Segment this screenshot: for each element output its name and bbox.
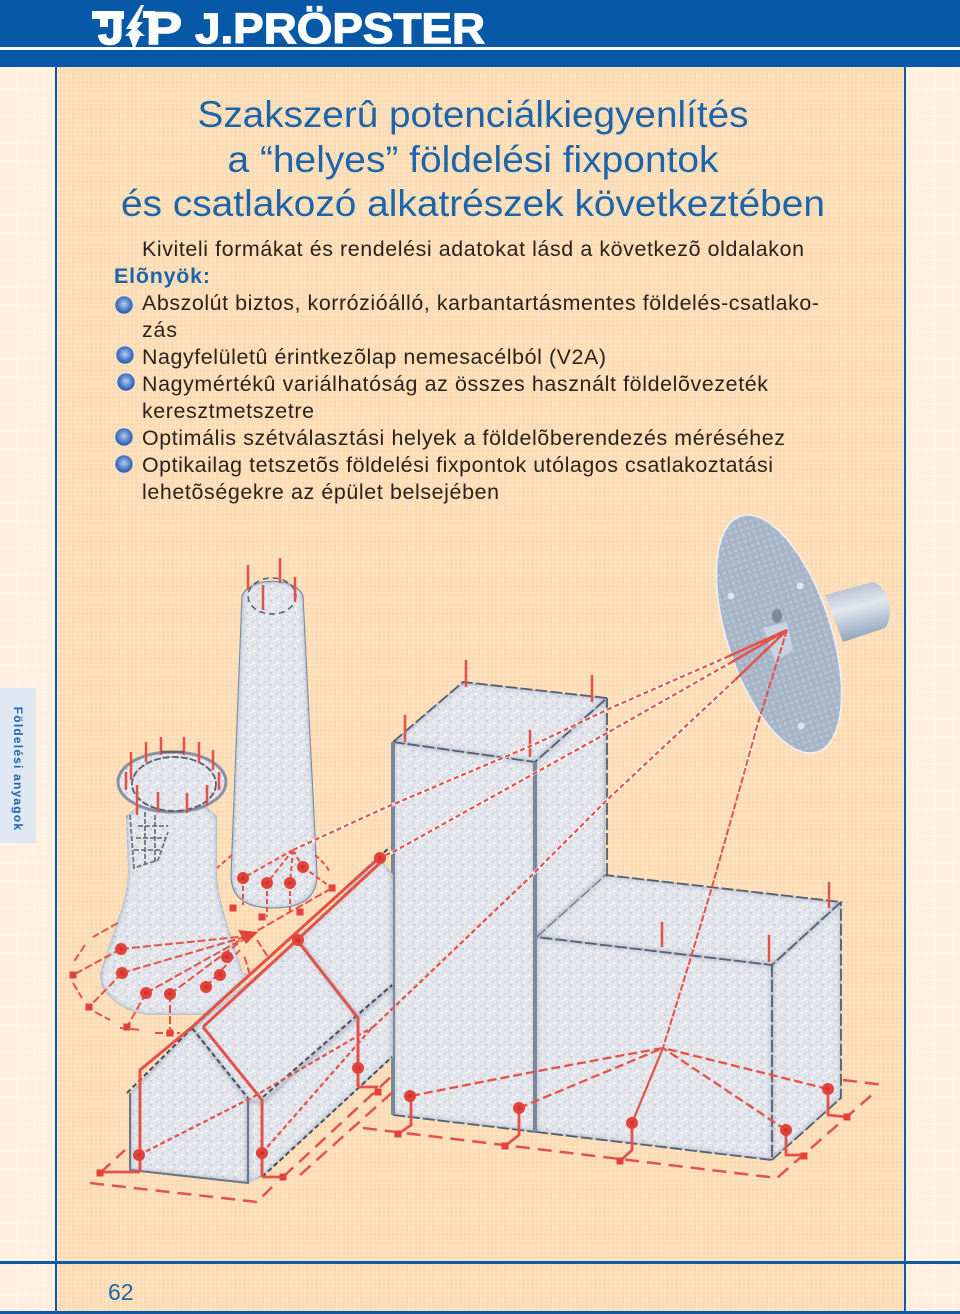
text block: intro and advantages: Optikailag tetszetõs földelési fixpontok utólagos csatlakoztatási [142, 453, 773, 477]
bullets [115, 296, 135, 473]
text block: intro and advantages: Elõnyök: [114, 264, 210, 288]
logo: J/P monogram [92, 3, 182, 54]
title [121, 94, 825, 224]
text block: intro and advantages: Optimális szétválasztási helyek a földelõberendezés méréséhez [142, 426, 785, 450]
title: Szakszerû potenciálkiegyenlítés [198, 94, 748, 135]
side tab: Földelési anyagok [11, 707, 25, 831]
logo: J/P monogram: P [146, 3, 182, 54]
logo: company name: J.PRÖPSTER [195, 5, 485, 53]
illustration: tall block building [393, 660, 607, 1132]
text block: intro and advantages [114, 237, 819, 504]
illustration: flange connector [691, 500, 890, 768]
illustration: red grounding network [90, 630, 884, 1202]
side tab [0, 688, 36, 843]
text block: intro and advantages: Nagyfelületû érintkezõlap nemesacélból (V2A) [142, 345, 606, 369]
illustration: cooling tower [70, 737, 332, 1036]
logo: J/P monogram: J [98, 3, 124, 54]
text block: intro and advantages: keresztmetszetre [142, 399, 314, 423]
text block: intro and advantages: zás [142, 318, 177, 342]
header band with logo [0, 0, 960, 67]
title: és csatlakozó alkatrészek következtében [121, 183, 825, 224]
title: a “helyes” földelési fixpontok [228, 139, 719, 180]
text block: intro and advantages: Nagymértékû variálhatóság az összes használt földelõvezeték [142, 372, 768, 396]
text block: intro and advantages: Kiviteli formákat és rendelési adatokat lásd a következõ oldalakon [142, 237, 804, 261]
illustration: chimney [217, 558, 336, 920]
text block: intro and advantages: lehetõségekre az épület belsejében [142, 480, 499, 504]
illustration: lower block building [536, 875, 841, 1160]
background: left margin column [0, 60, 56, 1314]
illustration: gabled house [127, 847, 393, 1183]
background: right margin column [905, 60, 960, 1314]
text block: intro and advantages: Abszolút biztos, korrózióálló, karbantartásmentes földelés-csatlako- [142, 291, 819, 315]
page number: 62 [108, 1279, 134, 1305]
